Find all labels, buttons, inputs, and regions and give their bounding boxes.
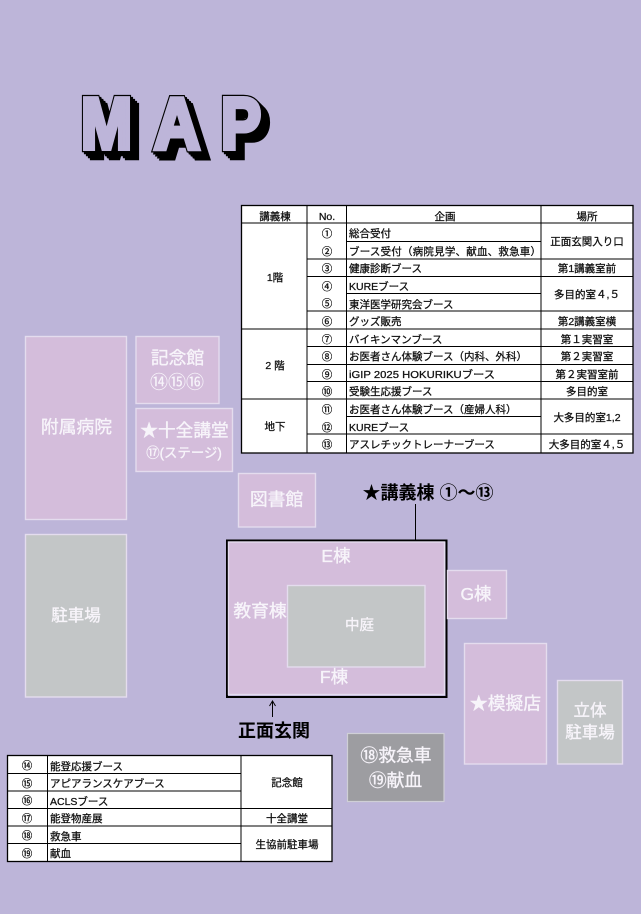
title: MAP: M — [85, 88, 136, 168]
label: lecture building — [362, 483, 494, 541]
table: lecture building booths: iGIP 2025 HOKURIKUブース — [349, 368, 495, 381]
building: university hospital: 附属病院 — [41, 417, 112, 437]
building: lecture building complex: 中庭 — [345, 617, 374, 634]
title: MAP: P — [221, 84, 261, 164]
table: lecture building booths: KUREブース — [349, 421, 409, 434]
table: lecture building booths: ⑪ — [322, 404, 333, 416]
table: lecture building booths: ⑦ — [322, 334, 333, 346]
building: library: 図書館 — [250, 490, 303, 510]
table: lecture building booths: 第１実習室 — [561, 333, 613, 346]
title: MAP: A — [160, 90, 206, 170]
table: other booths: 献血 — [50, 847, 71, 860]
table: other booths: ⑰ — [22, 813, 33, 825]
table: other booths: ⑮ — [22, 778, 33, 790]
table: lecture building booths: ⑥ — [322, 316, 333, 328]
building: G wing — [448, 570, 506, 618]
building: ambulance and blood donation: ⑲献血 — [369, 770, 422, 790]
table: other booths: アピアランスケアブース — [50, 777, 165, 790]
table: lecture building booths: 大多目的室４,５ — [549, 438, 625, 451]
building: Juzen auditorium: ★十全講堂 — [140, 420, 229, 440]
table: other booths: ⑯ — [22, 795, 33, 807]
building: mock shop: ★模擬店 — [470, 694, 541, 714]
table: other booths — [7, 755, 332, 862]
table: lecture building booths: 1階 — [267, 272, 284, 284]
arrow: to front entrance — [270, 701, 276, 717]
table: lecture building booths: ⑤ — [322, 298, 333, 310]
title: MAP: M — [81, 84, 132, 164]
building: mock shop — [464, 644, 546, 764]
table: lecture building booths: 企画 — [434, 210, 456, 223]
label: front entrance: 正面玄関 — [238, 721, 310, 741]
title: MAP: P — [225, 88, 265, 168]
table: other booths: 能登応援ブース — [50, 760, 123, 773]
title: MAP: P — [221, 84, 261, 164]
table: lecture building booths: ⑨ — [322, 369, 333, 381]
table: other booths: 記念館 — [271, 776, 303, 789]
table: lecture building booths: 総合受付 — [349, 227, 391, 240]
title: MAP: P — [227, 90, 267, 170]
table: lecture building booths: 地下 — [264, 420, 286, 433]
table: lecture building booths: 東洋医学研究会ブース — [349, 298, 453, 311]
table: lecture building booths: ⑩ — [322, 386, 333, 398]
table: other booths: 能登物産展 — [50, 812, 103, 825]
building: memorial hall — [136, 336, 219, 404]
table: other booths: ACLSブース — [50, 795, 108, 808]
table: other booths: 生協前駐車場 — [256, 838, 319, 851]
title: MAP: A — [154, 84, 200, 164]
table: lecture building booths: ③ — [322, 263, 333, 275]
table: lecture building booths: 受験生応援ブース — [349, 385, 432, 398]
table: lecture building booths: 健康診断ブース — [349, 262, 422, 275]
table: other booths: ⑭ — [22, 760, 33, 772]
table: lecture building booths — [241, 205, 633, 453]
table: lecture building booths: 場所 — [576, 210, 598, 223]
building: lecture building complex: F棟 — [320, 667, 349, 687]
table: lecture building booths: ④ — [322, 281, 333, 293]
table: lecture building booths: ① — [322, 228, 333, 240]
building: multistory parking: 駐車場 — [565, 723, 615, 742]
table: lecture building booths: KUREブース — [349, 280, 409, 293]
title: MAP: M — [83, 86, 134, 166]
table: lecture building booths: 第２実習室前 — [556, 368, 618, 381]
table: lecture building booths: 正面玄関入り口 — [550, 235, 624, 248]
label: lecture building: ★講義棟 ①〜⑬ — [362, 483, 494, 503]
table: lecture building booths: No. — [319, 211, 335, 223]
building: ambulance and blood donation: ⑱救急車 — [360, 746, 432, 766]
building: lecture building complex — [227, 540, 446, 697]
title: MAP: M — [87, 90, 138, 170]
table: lecture building booths: 多目的室４,５ — [554, 288, 620, 301]
table: other booths: 救急車 — [50, 830, 82, 843]
building: parking lot: 駐車場 — [51, 606, 101, 625]
table: lecture building booths: ⑬ — [322, 439, 333, 451]
table: lecture building booths: 第1講義室前 — [558, 262, 616, 275]
title: MAP: A — [154, 84, 200, 164]
title: MAP — [81, 84, 269, 172]
building: G wing: G棟 — [460, 584, 492, 604]
table: lecture building booths: 多目的室 — [566, 385, 608, 398]
table: lecture building booths: ② — [322, 246, 333, 258]
title: MAP: A — [156, 86, 202, 166]
table: other booths: ⑲ — [22, 848, 33, 860]
building: university hospital — [26, 336, 126, 520]
table: lecture building booths: 2 階 — [265, 360, 285, 372]
building: lecture building complex: E棟 — [321, 546, 351, 566]
building: lecture building complex: 教育棟 — [233, 601, 287, 621]
table: lecture building booths: ⑫ — [322, 422, 333, 434]
building: multistory parking — [558, 680, 622, 764]
building: Juzen auditorium: ⑰(ステージ) — [146, 446, 222, 460]
building: parking lot — [26, 534, 126, 697]
title: MAP: M — [89, 92, 140, 172]
title: MAP: A — [162, 92, 208, 172]
building: memorial hall: 記念館 — [151, 348, 204, 368]
building: multistory parking: 立体 — [574, 701, 607, 720]
building: memorial hall: ⑭⑮⑯ — [150, 372, 204, 392]
table: lecture building booths: 第2講義室横 — [558, 315, 617, 328]
table: lecture building booths: アスレチックトレーナーブース — [349, 438, 495, 451]
table: lecture building booths: お医者さん体験ブース（内科、外科） — [349, 350, 527, 363]
building: library — [238, 474, 316, 527]
table: lecture building booths: ブース受付（病院見学、献血、救急車） — [349, 245, 541, 258]
table: lecture building booths: バイキンマンブース — [349, 333, 442, 346]
building: Juzen auditorium — [136, 408, 232, 472]
title: MAP: A — [158, 88, 204, 168]
table: lecture building booths: 第２実習室 — [561, 350, 613, 363]
table: lecture building booths: お医者さん体験ブース（産婦人科） — [349, 403, 516, 416]
title: MAP: P — [223, 86, 263, 166]
table: lecture building booths: 講義棟 — [259, 210, 291, 223]
title: MAP: M — [81, 84, 132, 164]
table: lecture building booths: グッズ販売 — [349, 315, 402, 328]
table: lecture building booths: 大多目的室1,2 — [553, 411, 621, 424]
table: lecture building booths: ⑧ — [322, 351, 333, 363]
table: other booths: 十全講堂 — [266, 812, 308, 825]
table: other booths: ⑱ — [22, 830, 33, 842]
building: ambulance and blood donation — [348, 734, 444, 802]
title: MAP: P — [229, 92, 269, 172]
